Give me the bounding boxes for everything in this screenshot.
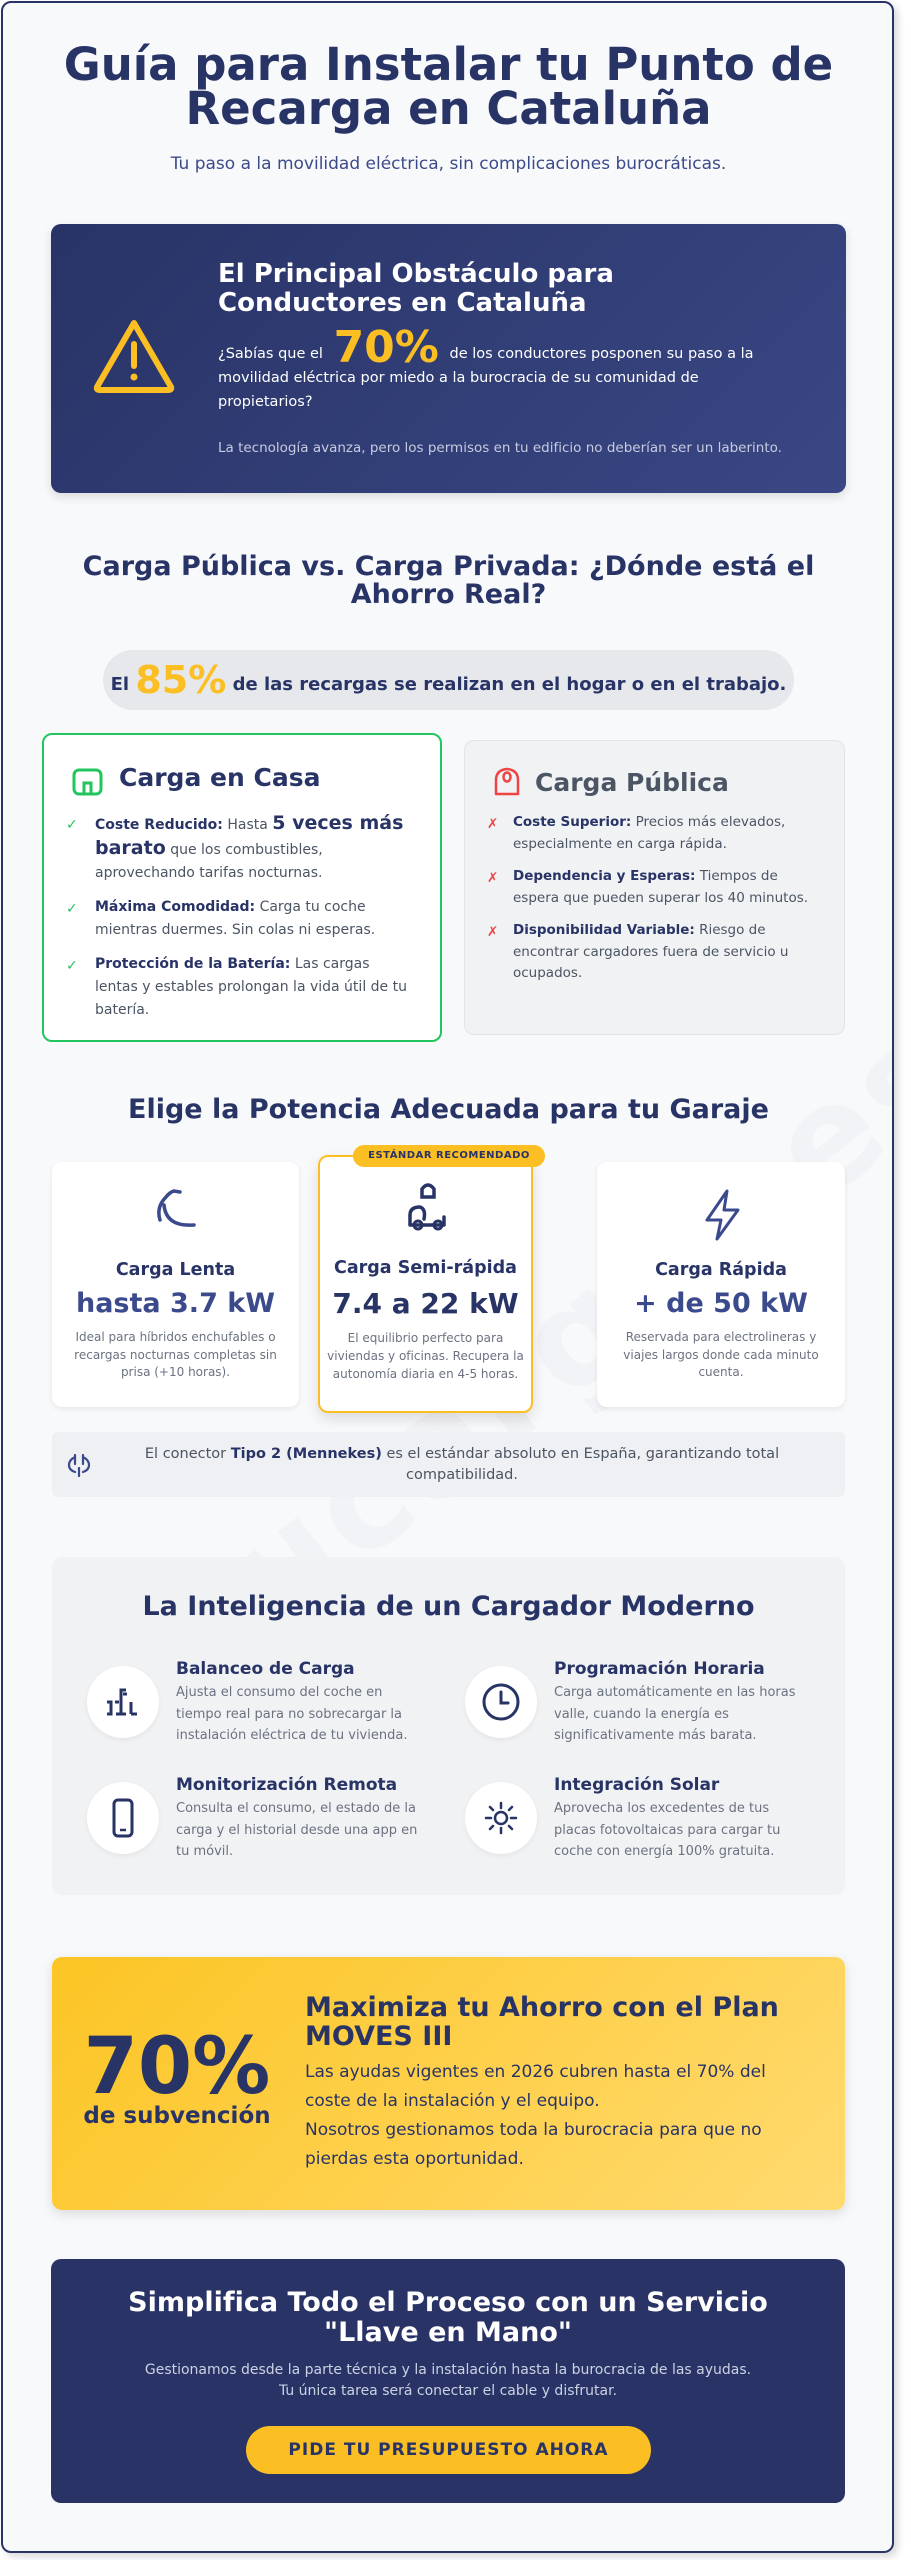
button: PIDE TU PRESUPUESTO AHORA xyxy=(288,2440,609,2460)
heading: power: Elige la Potencia Adecuada para tu Garaje xyxy=(128,1094,769,1125)
title: Carga Semi-rápida xyxy=(334,1258,517,1278)
list: Coste Superior: Precios más elevados, especialmente en carga rápida. xyxy=(513,814,785,852)
text: Nosotros gestionamos toda la burocracia para que no pierdas esta oportunidad. xyxy=(305,2120,762,2169)
list: Protección de la Batería: Las cargas lentas y estables prolongan la vida útil de tu batería. xyxy=(95,956,407,1018)
icon: load balance xyxy=(87,1666,159,1738)
heading: Maximiza tu Ahorro con el Plan MOVES III xyxy=(305,1992,779,2052)
list: ✓ xyxy=(66,817,78,833)
panel: main obstacle xyxy=(51,224,846,493)
heading: public vs private: Carga Pública vs. Carga Privada: ¿Dónde está el xyxy=(83,551,814,582)
title: Monitorización Remota xyxy=(176,1775,397,1795)
heading: El Principal Obstáculo para xyxy=(218,259,614,289)
icon: house xyxy=(72,768,102,796)
panel: MOVES III xyxy=(52,1957,845,2210)
stat: 70%: de subvención xyxy=(83,2103,271,2129)
value: + de 50 kW xyxy=(634,1288,808,1319)
panel: intelligence xyxy=(52,1557,845,1895)
heading: Carga en Casa xyxy=(119,763,320,792)
list: Disponibilidad Variable: Riesgo de encontrar cargadores fuera de servicio u ocupados. xyxy=(513,922,788,981)
text: Gestionamos desde la parte técnica y la instalación hasta la burocracia de las ayudas. xyxy=(145,2362,751,2378)
list: ✗ xyxy=(487,924,498,940)
card: carga rapida xyxy=(597,1162,845,1407)
text xyxy=(145,2362,751,2399)
stat: 70%: 70% xyxy=(84,2022,270,2112)
panel: CTA xyxy=(51,2259,845,2503)
list: ✓ xyxy=(66,958,78,974)
badge: ESTÁNDAR RECOMENDADO xyxy=(368,1150,530,1161)
heading: Carga Pública xyxy=(535,768,729,797)
list: Máxima Comodidad: Carga tu coche mientras duermes. Sin colas ni esperas. xyxy=(95,899,375,938)
feature: monitorizacion xyxy=(87,1775,417,1859)
title: Balanceo de Carga xyxy=(176,1659,355,1679)
icon: plug vehicle xyxy=(408,1183,446,1230)
text: Ajusta el consumo del coche en tiempo real para no sobrecargar la instalación eléctrica de tu vivienda. xyxy=(176,1685,407,1743)
desc: Reservada para electrolineras y viajes largos donde cada minuto cuenta. xyxy=(623,1330,819,1379)
panel: carga en casa xyxy=(42,733,442,1042)
note: La tecnología avanza, pero los permisos en tu edificio no deberían ser un laberinto. xyxy=(218,440,782,456)
heading: public vs private: Ahorro Real? xyxy=(351,579,546,610)
title: Carga Lenta xyxy=(116,1260,235,1280)
list: ✗ xyxy=(487,816,498,832)
icon: clock xyxy=(465,1666,537,1738)
icon: bolt xyxy=(705,1190,740,1240)
heading: La Inteligencia de un Cargador Moderno xyxy=(142,1591,755,1622)
text: Tu única tarea será conectar el cable y disfrutar. xyxy=(279,2383,617,2399)
card: semi-rapida xyxy=(318,1155,533,1413)
icon: connector xyxy=(68,1454,90,1478)
heading: "Llave en Mano" xyxy=(324,2317,572,2348)
list: ✗ xyxy=(487,870,498,886)
icon: public charger xyxy=(494,768,520,796)
list: Dependencia y Esperas: Tiempos de espera que pueden superar los 40 minutos. xyxy=(513,868,808,906)
text: El conector Tipo 2 (Mennekes) es el estándar absoluto en España, garantizando total compatibilidad. xyxy=(145,1446,779,1483)
button xyxy=(246,2426,651,2474)
text: Consulta el consumo, el estado de la carga y el historial desde una app en tu móvil. xyxy=(176,1801,417,1859)
text: Carga automáticamente en las horas valle, cuando la energía es significativamente más barata. xyxy=(554,1685,795,1743)
icon: warning xyxy=(94,320,174,393)
heading: Conductores en Cataluña xyxy=(218,288,587,318)
feature: balanceo xyxy=(87,1659,407,1743)
panel: carga publica xyxy=(464,740,845,1035)
list: Coste Reducido: Hasta 5 veces más barato que los combustibles, aprovechando tarifas nocturnas. xyxy=(95,812,403,881)
heading: Simplifica Todo el Proceso con un Servicio xyxy=(128,2287,768,2318)
title: Integración Solar xyxy=(554,1775,719,1795)
list: ✓ xyxy=(66,901,78,917)
title: Programación Horaria xyxy=(554,1659,765,1679)
subtitle: Tu paso a la movilidad eléctrica, sin complicaciones burocráticas. xyxy=(171,154,726,174)
icon: moon xyxy=(157,1189,196,1227)
feature: programacion xyxy=(465,1659,795,1743)
desc: Ideal para híbridos enchufables o recargas nocturnas completas sin prisa (+10 horas). xyxy=(74,1330,277,1379)
text: Aprovecha los excedentes de tus placas fotovoltaicas para cargar tu coche con energía 100% gratuita. xyxy=(554,1801,780,1859)
stat text: ¿Sabías que el 70% de los conductores posponen su paso a la movilidad eléctrica por miedo a la burocracia de su comunidad de propietarios? xyxy=(218,322,753,410)
title: Carga Rápida xyxy=(655,1260,787,1280)
list xyxy=(66,812,407,1018)
icon: phone xyxy=(87,1782,159,1854)
feature: solar xyxy=(465,1775,780,1859)
title xyxy=(64,38,833,135)
text: Las ayudas vigentes en 2026 cubren hasta el 70% del coste de la instalación y el equipo. xyxy=(305,2062,766,2111)
pill: 85%: El 85% de las recargas se realizan en el hogar o en el trabajo. xyxy=(111,658,786,702)
card: carga lenta xyxy=(52,1162,299,1407)
value: 7.4 a 22 kW xyxy=(332,1287,519,1320)
connector note xyxy=(52,1432,845,1497)
desc: El equilibrio perfecto para viviendas y oficinas. Recupera la autonomía diaria en 4-5 horas. xyxy=(327,1331,524,1381)
icon: sun xyxy=(465,1782,537,1854)
value: hasta 3.7 kW xyxy=(76,1288,275,1319)
list xyxy=(487,814,808,981)
heading xyxy=(128,2287,768,2348)
title: Guía para Instalar tu Punto de xyxy=(64,38,833,91)
heading: public vs private xyxy=(83,551,814,610)
title: Recarga en Cataluña xyxy=(185,82,712,135)
heading xyxy=(218,259,614,318)
text xyxy=(305,2062,766,2169)
badge xyxy=(353,1145,545,1167)
